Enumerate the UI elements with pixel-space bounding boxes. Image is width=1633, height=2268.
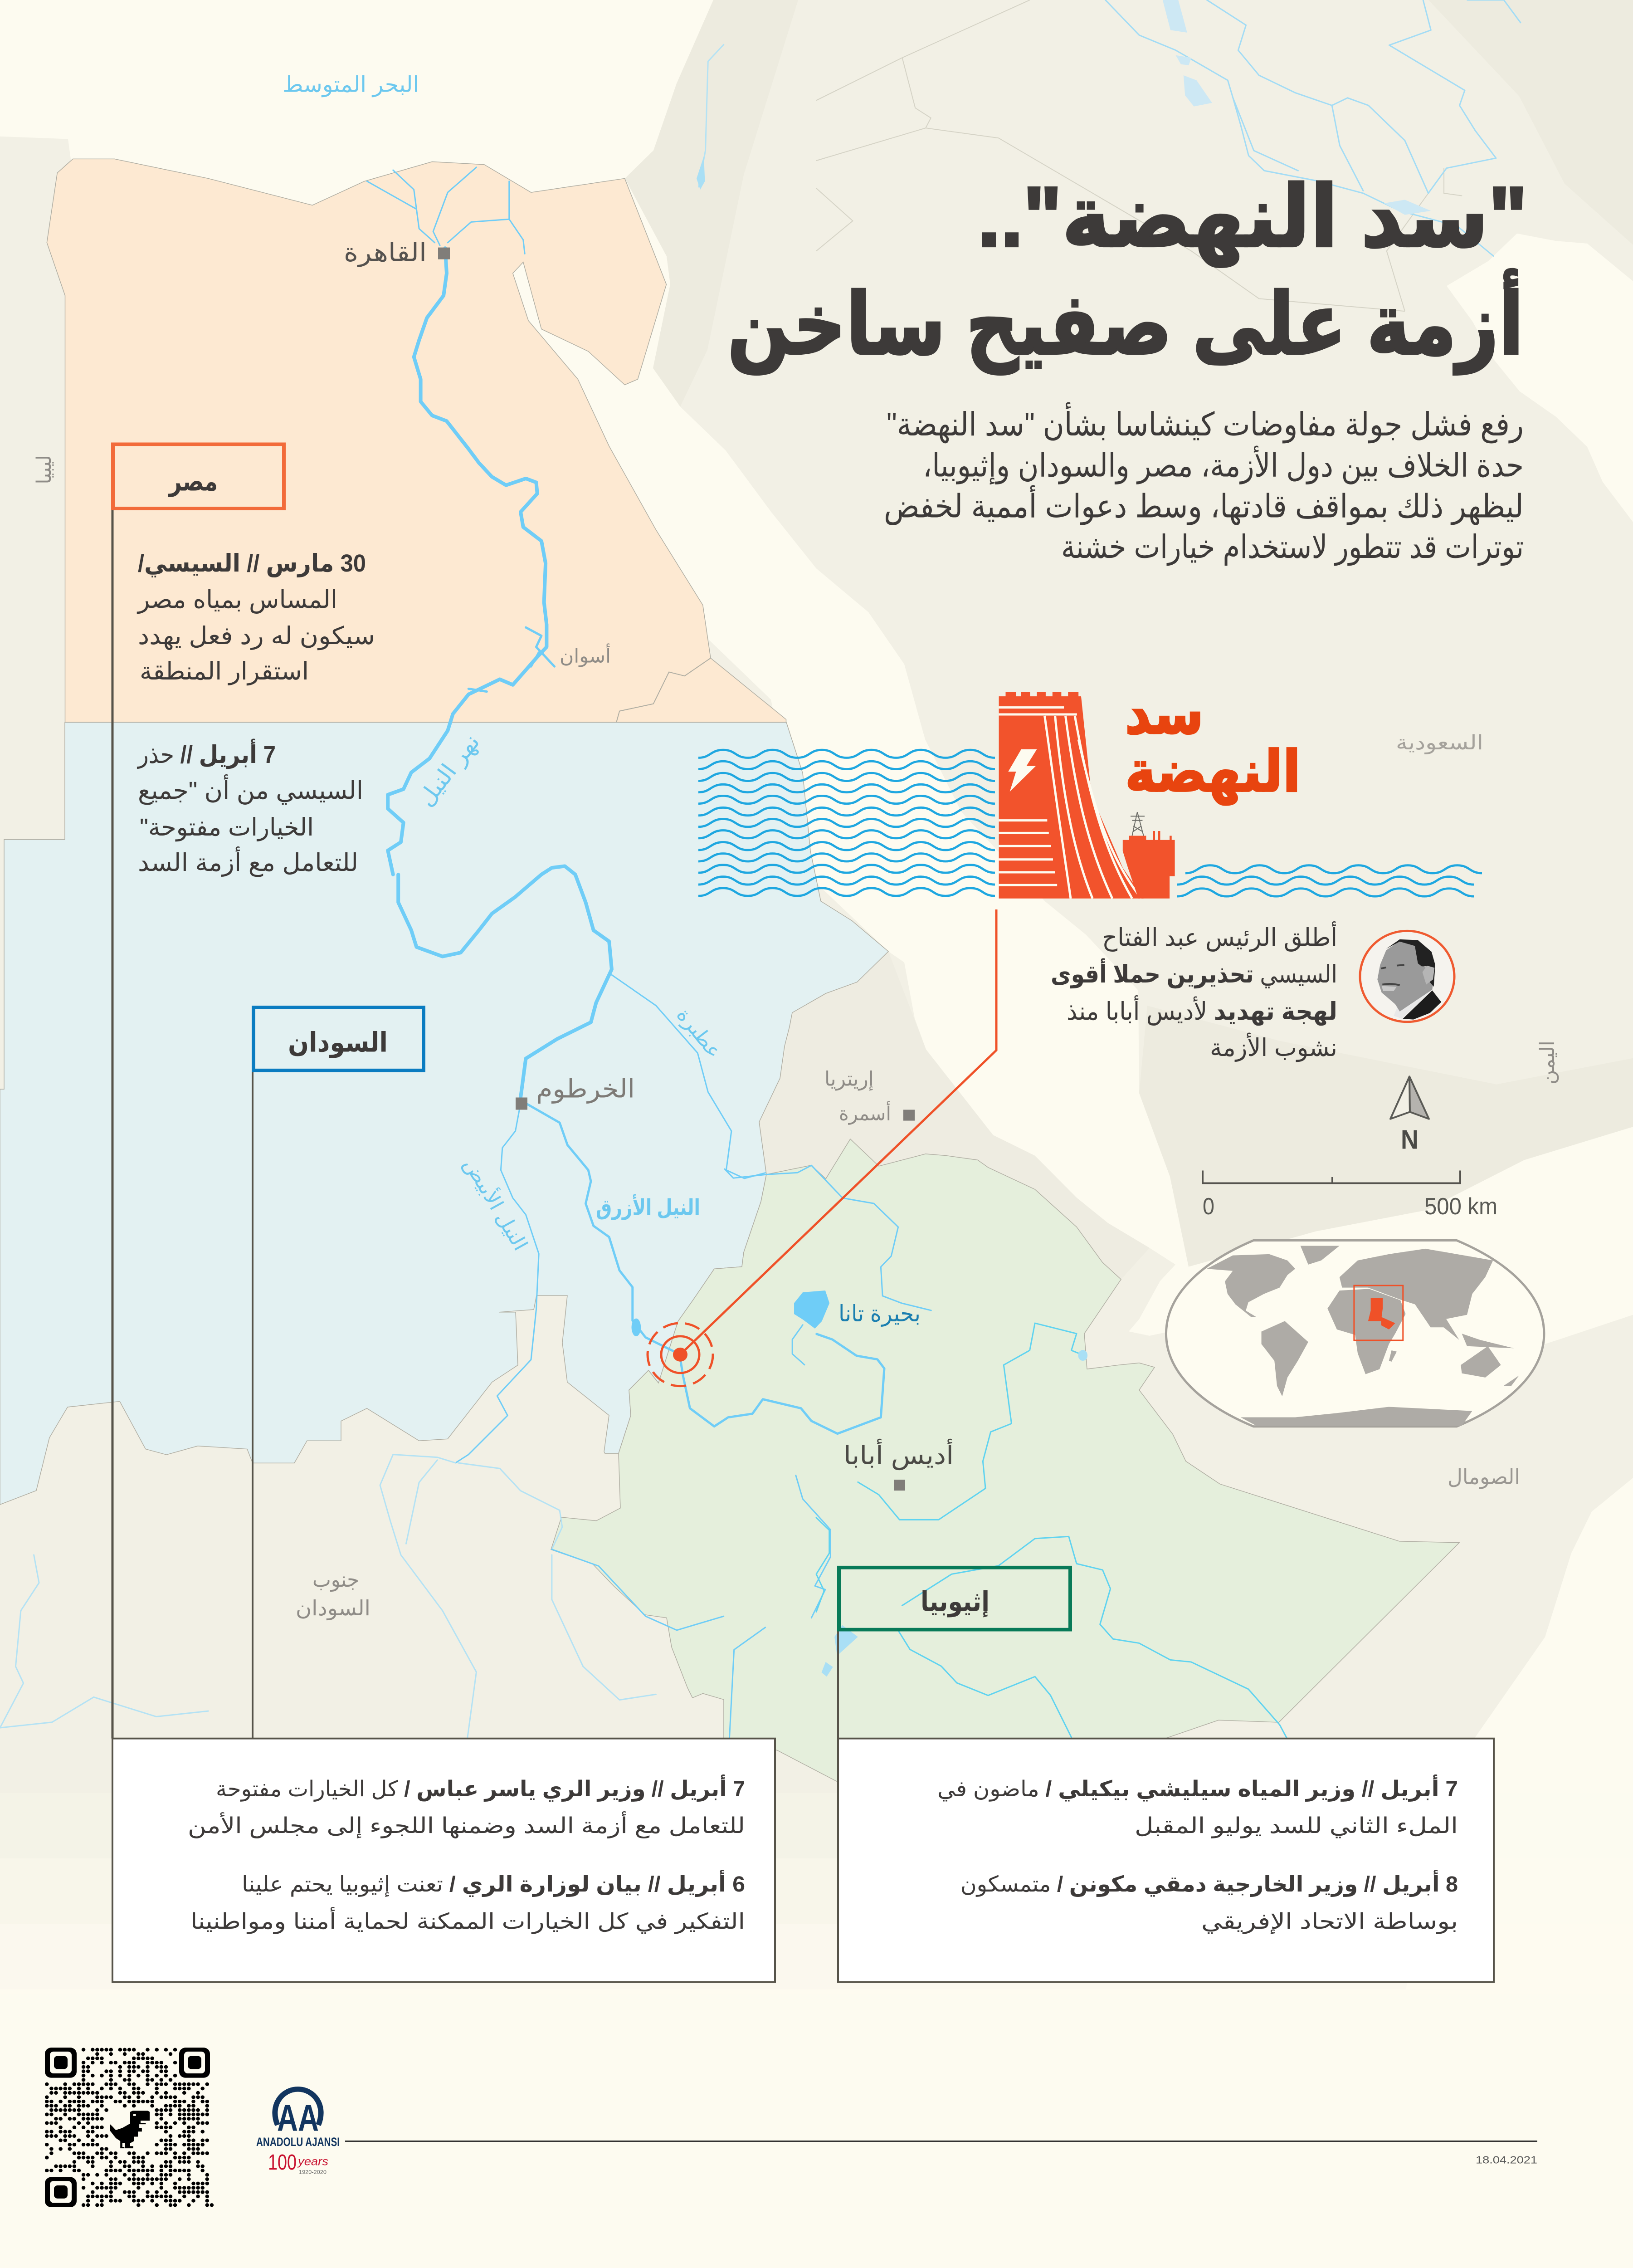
rivers: Mesopotamia [1105,0,1521,256]
text block: Sisi's warnings: نشوب الأزمة [1210,1032,1337,1062]
title: "سد النهضة".. [978,169,1527,267]
map: Egypt [47,159,786,737]
panel: Egypt-Sudan officials: للتعامل مع أزمة السد وضمنها اللجوء إلى مجلس الأمن [188,1811,745,1839]
icon: dam with power station [999,692,1175,899]
text block: Sisi's warnings [1051,921,1337,1062]
label: Lake Tana: بحيرة تانا [838,1301,921,1327]
label: Blue Nile: النيل الأزرق [596,1193,700,1220]
rivers: Ethiopia and Lake Tana [679,1165,931,1618]
label: Libya: ليبيا [33,455,55,484]
dam name: سد [1125,682,1204,746]
Egypt statements: المساس بمياه مصر [136,586,337,614]
city: Asmara: أسمرة [839,1100,891,1125]
Sisi warning statements: 7 أبريل // حذر [136,738,276,769]
logo: Anadolu Agency: 1920-2020 [299,2170,327,2175]
inset world map [1166,1240,1544,1427]
rivers: Sudan and South Sudan [0,866,765,1749]
label: White Nile: النيل الأبيض [459,1154,533,1255]
waves: river downstream of the dam [1177,865,1482,896]
scale bar [1203,1170,1497,1220]
panel: Egypt-Sudan officials: 7 أبريل // وزير الري ياسر عباس / كل الخيارات مفتوحة [216,1774,745,1802]
label: Saudi Arabia: السعودية [1396,731,1483,755]
map: Ethiopia [551,1139,1459,1793]
title [727,169,1527,375]
Egypt statements [136,549,375,685]
Egypt statements: استقرار المنطقة [140,657,309,685]
country box: Sudan [253,1007,424,1070]
city: Addis Ababa [843,1438,954,1491]
logo: Anadolu Agency: years [297,2156,328,2168]
Egypt statements: سيكون له رد فعل يهدد [138,622,375,650]
intro paragraph: حدة الخلاف بين دول الأزمة، مصر والسودان وإثيوبيا، [923,445,1524,484]
panel: Egypt-Sudan officials: 6 أبريل // بيان لوزارة الري / تعنت إثيوبيا يحتم علينا [242,1870,745,1897]
panel: Ethiopia officials: الملء الثاني للسد يوليو المقبل [1135,1814,1458,1838]
label: Mediterranean Sea: البحر المتوسط [283,73,419,97]
city: Asmara [839,1100,915,1125]
panel: Egypt-Sudan officials [112,1739,775,1982]
leader lines from country boxes [112,509,838,1739]
dam name: النهضة [1125,740,1301,805]
label: South Sudan: جنوب [312,1568,359,1592]
intro paragraph: ليظهر ذلك بمواقف قادتها، وسط دعوات أممية لخفض [884,485,1524,525]
text block: Sisi's warnings: لهجة تهديد لأديس أبابا منذ [1067,995,1337,1026]
panel: Ethiopia officials: 7 أبريل // وزير المياه سيليشي بيكيلي / ماضون في [937,1774,1458,1802]
panel: Egypt-Sudan officials: التفكير في كل الخيارات الممكنة لحماية أمننا ومواطنينا [190,1907,745,1934]
logo: Anadolu Agency: ANADOLU AJANSI [256,2135,340,2149]
label: Somalia: الصومال [1448,1465,1520,1489]
label: Aswan: أسوان [560,643,611,667]
waves: reservoir upstream of the dam [698,750,995,896]
intro paragraph: توترات قد تتطور لاستخدام خيارات خشنة [1061,529,1524,566]
intro paragraph: رفع فشل جولة مفاوضات كينشاسا بشأن "سد النهضة" [887,402,1524,444]
map: Sudan [0,722,888,1505]
portrait: President Sisi [1360,931,1454,1022]
map: regional borders [816,0,1462,311]
city: Khartoum: الخرطوم [536,1075,635,1104]
panel: Ethiopia officials [838,1739,1494,1982]
text block: Sisi's warnings: أطلق الرئيس عبد الفتاح [1102,921,1337,952]
panel: Ethiopia officials: 8 أبريل // وزير الخارجية دمقي مكونن / متمسكون [960,1870,1458,1897]
label: Eritrea: إريتريا [824,1067,874,1091]
rivers: Mediterranean region and Nile in Egypt [367,44,724,875]
footer rule [345,2141,1537,2142]
city: Cairo: القاهرة [344,238,427,267]
dam name [1125,682,1301,805]
north arrow [1390,1076,1429,1154]
Sisi warning statements [136,738,363,877]
label: South Sudan [296,1568,370,1621]
Sisi warning statements: للتعامل مع أزمة السد [138,846,358,877]
label: Yemen: اليمن [1536,1041,1559,1085]
country box: Egypt: مصر [168,466,218,497]
scale bar: 0 [1203,1193,1214,1220]
panel: Ethiopia officials: بوساطة الاتحاد الإفريقي [1201,1910,1458,1934]
intro paragraph [884,402,1524,566]
city: Addis Ababa: أديس أبابا [843,1438,954,1470]
country box: Egypt [113,444,284,508]
city: Khartoum [516,1075,635,1110]
scale bar: 500 km [1424,1193,1497,1220]
country box: Ethiopia: إثيوبيا [921,1586,990,1618]
logo: Anadolu Agency [256,2089,340,2175]
label: South Sudan: السودان [296,1596,370,1621]
logo: Anadolu Agency: 100 [268,2151,297,2175]
north arrow: N [1401,1124,1419,1154]
Sisi warning statements: الخيارات مفتوحة" [140,813,314,841]
label: Atbara: عطبرة [672,1004,726,1063]
rivers: eastern Ethiopia and Somalia [816,1323,1292,1749]
country box: Sudan: السودان [288,1027,388,1058]
text block: Sisi's warnings: السيسي تحذيرين حملا أقوى [1051,958,1337,989]
QR code [45,2048,212,2207]
Sisi warning statements: السيسي من أن "جميع [138,774,363,805]
country box: Ethiopia [839,1568,1070,1630]
logo: Anadolu Agency: AA [277,2097,319,2139]
label: River Nile: نهر النيل [413,730,485,811]
Egypt statements: 30 مارس // السيسي/ [138,549,366,578]
date: 18.04.2021 [1476,2154,1537,2166]
dam location marker and leader line [648,909,996,1386]
